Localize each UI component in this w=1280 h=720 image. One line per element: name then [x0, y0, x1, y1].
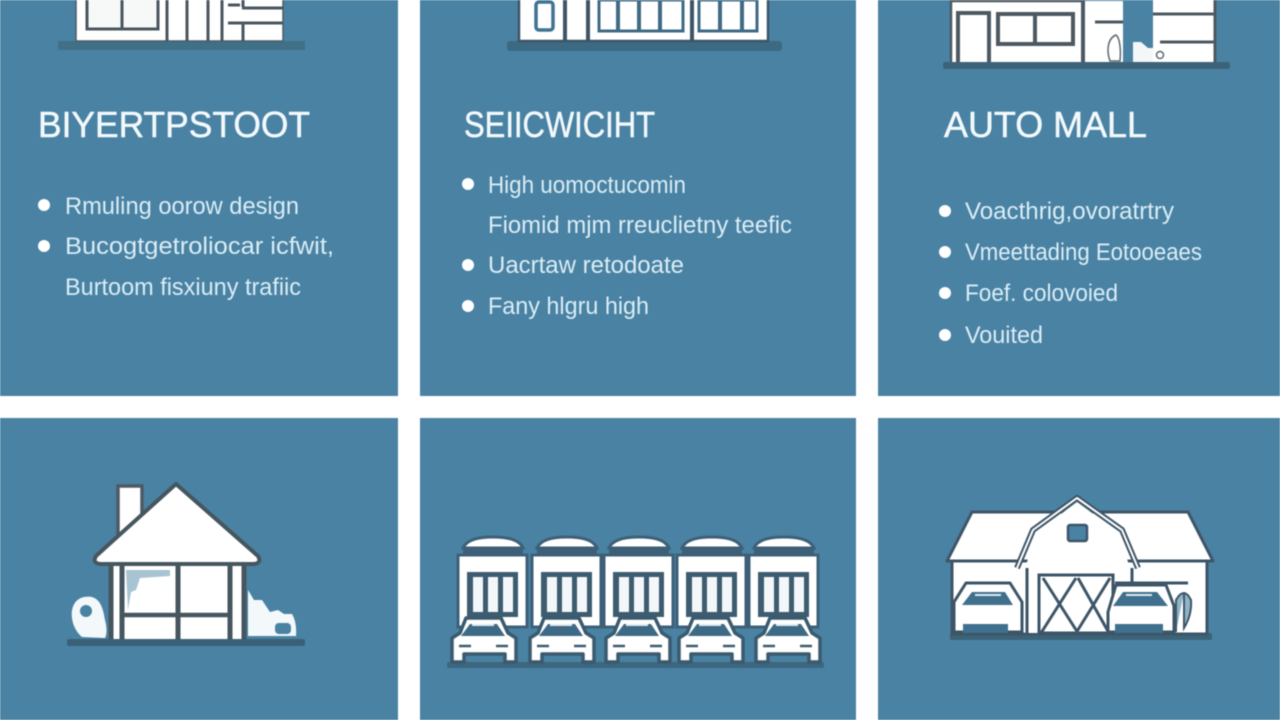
heading: top left: BIYERTPSTOOT [38, 104, 310, 145]
icon: house [67, 484, 305, 646]
bullet list: top right: Voacthrig,ovoratrtry [965, 198, 1174, 225]
panel: top middle [420, 0, 856, 396]
bullet list: top left: Bucogtgetroliocar icfwit, [65, 233, 334, 260]
heading: top middle: SEIICWICIHT [464, 104, 655, 145]
panel: bottom right [878, 418, 1280, 720]
bullet list: top middle: High uomoctucomin [488, 172, 686, 199]
bullet list: top left: Burtoom fisxiuny trafiic [65, 274, 301, 301]
bullet list: top right: Vmeettading Eotooeaes [965, 239, 1202, 266]
panel: top left [0, 0, 398, 396]
icon: left shrub [72, 597, 106, 638]
bullet list: top middle: Fany hlgru high [488, 293, 649, 320]
panel: bottom middle [420, 418, 856, 720]
bullet list: top right [939, 198, 1202, 349]
bullet list: top middle: Uacrtaw retodoate [488, 252, 684, 279]
icon: row of garages and cars [447, 537, 824, 668]
icon: right car [1108, 583, 1191, 633]
icon: left car [954, 583, 1022, 633]
bullet list: top middle [462, 172, 792, 320]
bullet list: top right: Foef. colovoied [965, 280, 1118, 307]
icon: top middle building [507, 0, 782, 51]
bullet list: top left: Rmuling oorow design [65, 193, 299, 220]
bullet list: top right: Vouited [965, 322, 1043, 349]
heading: top right: AUTO MALL [944, 104, 1147, 145]
panel: bottom left [0, 418, 398, 720]
icon: top left building [58, 0, 305, 50]
icon: right shrub [248, 590, 296, 636]
icon: top right building [943, 0, 1230, 69]
icon: barn garage [947, 498, 1213, 640]
bullet list: top middle: Fiomid mjm rreuclietny teefic [488, 212, 792, 239]
panel: top right [878, 0, 1280, 396]
bullet list: top left [38, 193, 334, 301]
